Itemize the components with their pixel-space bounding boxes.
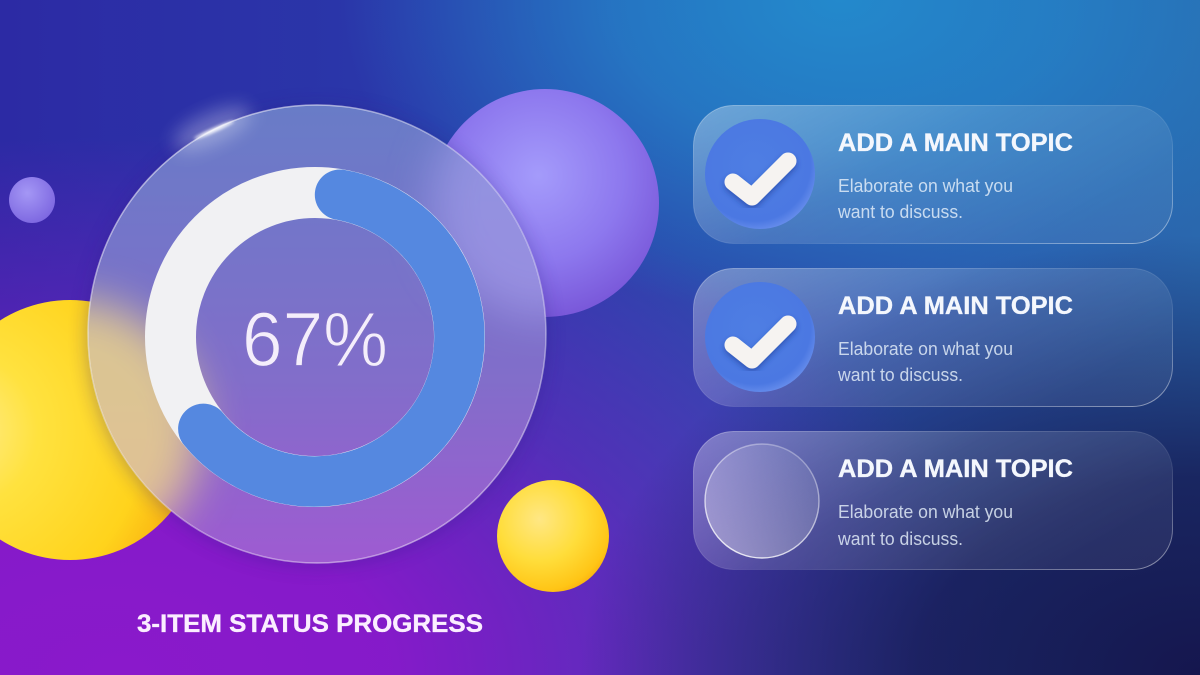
large purple sphere	[431, 89, 659, 317]
small purple sphere	[9, 177, 55, 223]
icon: completed check	[705, 282, 815, 392]
chart title: 3-ITEM STATUS PROGRESS	[137, 610, 483, 638]
donut progress arc 67%	[203, 195, 459, 482]
donut track	[170, 192, 460, 482]
body text: want to discuss.	[837, 365, 963, 385]
body text: want to discuss.	[837, 529, 963, 549]
panel: topic 1	[694, 106, 1172, 244]
panel: topic 3	[694, 432, 1172, 570]
heading: ADD A MAIN TOPIC	[838, 455, 1073, 483]
heading: ADD A MAIN TOPIC	[838, 129, 1073, 157]
icon: empty glass circle	[705, 444, 819, 558]
body text: Elaborate on what you	[838, 502, 1013, 522]
small yellow sphere	[497, 480, 609, 592]
panel: topic 2	[694, 268, 1172, 406]
percentage value: 67%	[242, 297, 388, 383]
highlight flare	[168, 97, 256, 159]
body text: Elaborate on what you	[838, 176, 1013, 196]
heading: ADD A MAIN TOPIC	[838, 292, 1073, 320]
body text: Elaborate on what you	[838, 339, 1013, 359]
icon: completed check	[705, 119, 815, 229]
glass donut chart	[0, 89, 659, 567]
large yellow sphere	[0, 300, 200, 560]
frosted glass disc	[0, 89, 659, 567]
body text: want to discuss.	[837, 202, 963, 222]
